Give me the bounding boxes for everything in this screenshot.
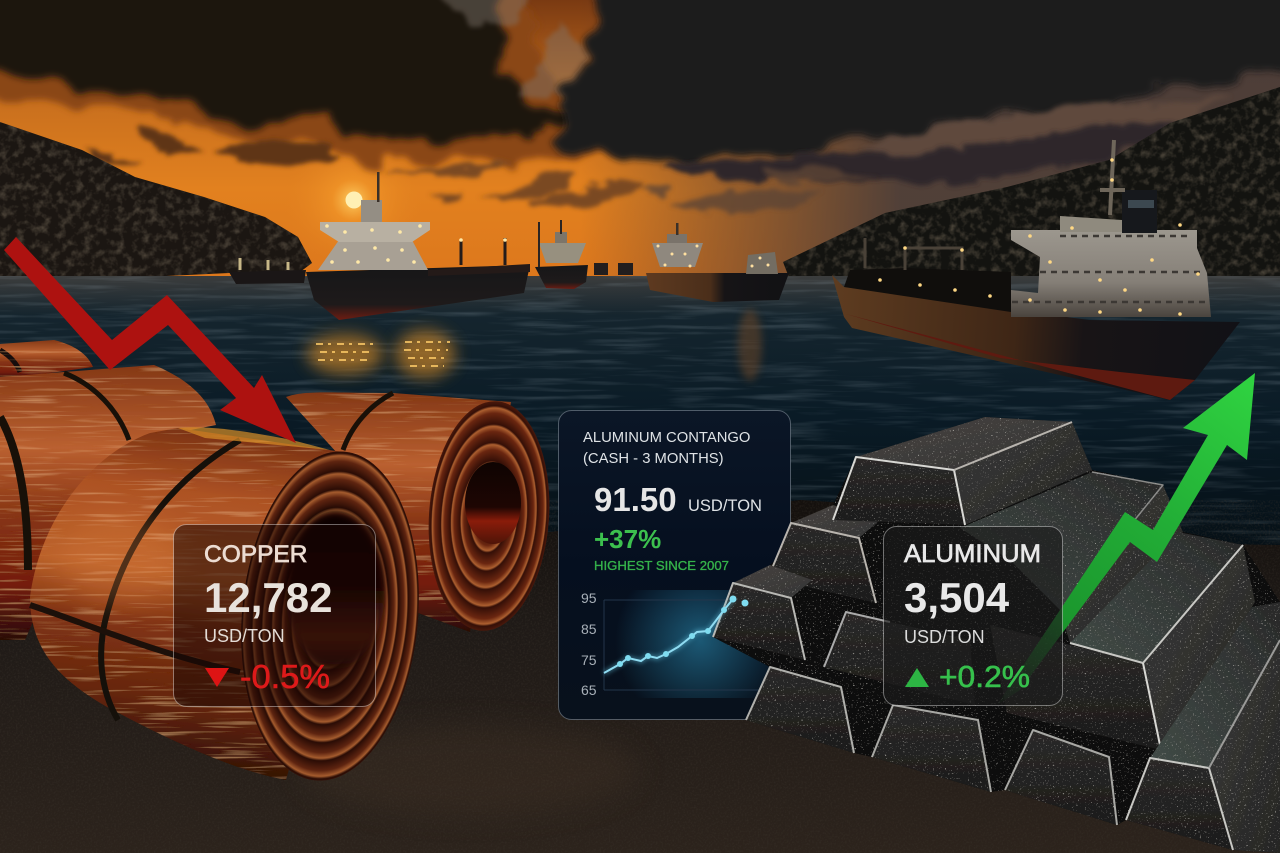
cloud: lit band — [860, 95, 1230, 165]
copper change: -0.5% — [240, 658, 330, 695]
tanker left — [306, 172, 530, 320]
ingot bottom row 2 — [872, 705, 991, 792]
copper coil back left — [0, 365, 216, 640]
ingot second row left — [768, 505, 880, 603]
aluminum price value: 3,504 — [904, 574, 1010, 621]
sky with sunset — [0, 0, 1280, 290]
large tanker right — [832, 140, 1240, 400]
copper coil front — [30, 427, 432, 788]
chart glow and grid — [604, 590, 790, 698]
panel title: ALUMINUM CONTANGO — [583, 430, 750, 446]
chart axis labels — [581, 590, 597, 698]
ingot third row centre — [824, 612, 975, 705]
cloud: left dark mass — [0, 0, 590, 140]
green rising arrow — [997, 373, 1255, 705]
chart axis labels: 75 — [581, 652, 597, 668]
aluminum contango line chart — [581, 590, 748, 698]
cloud: small centre clouds — [388, 160, 645, 207]
contango value: 91.50 — [594, 481, 677, 518]
cloud: lit underside — [0, 0, 622, 163]
hills — [0, 87, 1280, 312]
ingot top — [833, 417, 1092, 525]
contango unit: USD/TON — [688, 497, 762, 515]
card: copper price — [174, 524, 376, 706]
chart line glow — [604, 599, 733, 673]
ingot third row left — [713, 565, 812, 660]
ingot far right — [1126, 602, 1280, 853]
aluminum ingots — [713, 417, 1280, 853]
cloud: lower dark band — [660, 125, 1180, 185]
water — [0, 276, 1280, 556]
tanker right centre — [646, 223, 789, 302]
distant ship — [229, 258, 306, 284]
aluminum change: +0.2% — [939, 659, 1030, 694]
card: aluminum price — [884, 526, 1062, 706]
ingot bottom row 3 — [1005, 730, 1117, 825]
ingot second row back — [960, 472, 1183, 643]
copper unit: USD/TON — [204, 626, 285, 646]
copper price value: 12,782 — [204, 574, 332, 621]
copper coil right — [286, 392, 557, 635]
ingot large right — [990, 532, 1255, 750]
storm clouds — [0, 0, 1280, 214]
aluminum label: ALUMINUM — [904, 540, 1041, 568]
contango note: HIGHEST SINCE 2007 — [594, 558, 729, 573]
cloud: small left clouds — [78, 128, 343, 163]
aluminum unit: USD/TON — [904, 627, 985, 647]
icon: up triangle — [905, 668, 929, 687]
cloud: small right clouds — [640, 168, 880, 214]
ground — [0, 500, 1280, 853]
panel subtitle: (CASH - 3 MONTHS) — [583, 451, 724, 467]
red falling arrow — [4, 237, 296, 443]
chart axis labels: 65 — [581, 682, 597, 698]
cloud: right dark mass — [557, 0, 1280, 160]
copper label: COPPER — [204, 541, 307, 568]
icon: down triangle — [205, 668, 229, 687]
chart axis labels: 95 — [581, 590, 597, 606]
tanker centre — [535, 220, 633, 289]
ingot bottom row 1 — [746, 667, 854, 753]
chart line — [604, 599, 733, 673]
contango change: +37% — [594, 524, 661, 554]
chart points — [617, 596, 748, 667]
sun reflection — [307, 334, 383, 374]
ingot stack shadow — [713, 417, 1280, 853]
copper coil back top — [0, 340, 93, 380]
cloud: upper gap streaks — [440, 0, 590, 100]
panel: aluminum contango — [558, 410, 790, 720]
chart axis labels: 85 — [581, 621, 597, 637]
